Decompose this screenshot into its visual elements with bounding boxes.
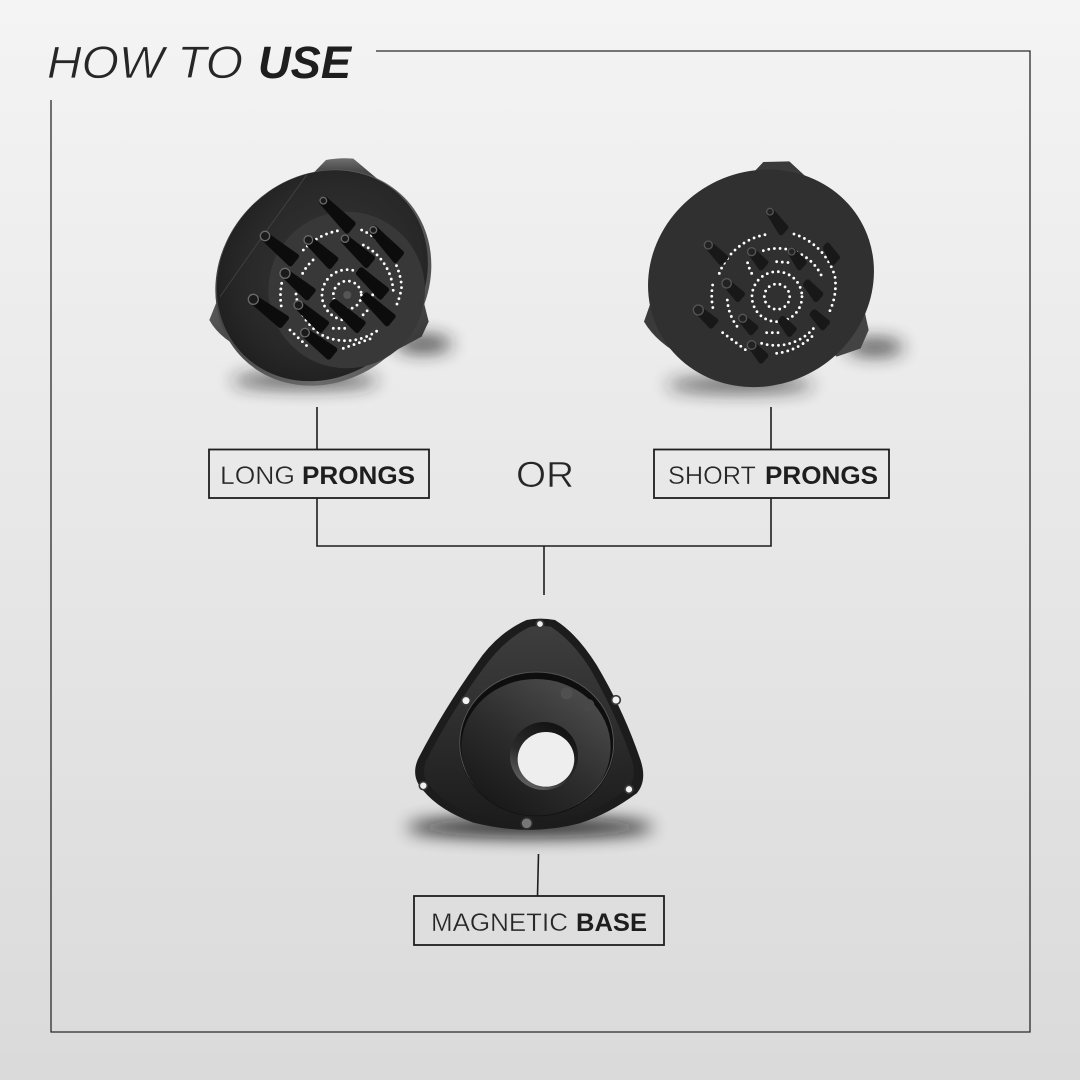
label: short prongs (654, 450, 889, 498)
label: short prongs: SHORT (668, 462, 756, 490)
connector: long prongs (317, 407, 771, 595)
product: long prongs diffuser (171, 125, 476, 430)
product: magnetic base (407, 619, 653, 837)
product: short prongs diffuser (608, 128, 914, 428)
title: HOW TO (47, 37, 243, 88)
connector: magnetic base (538, 854, 539, 896)
label: or: OR (516, 454, 574, 495)
label: magnetic base: BASE (576, 909, 647, 937)
long prongs (252, 199, 401, 357)
prong tips (248, 197, 377, 337)
label: long prongs (209, 450, 429, 498)
title: USE (258, 37, 353, 88)
label: magnetic base: MAGNETIC (431, 909, 568, 937)
label: magnetic base (414, 896, 664, 945)
label: short prongs: PRONGS (765, 462, 878, 490)
label: long prongs: LONG (220, 462, 295, 490)
screw holes (419, 620, 633, 829)
short prongs (697, 210, 837, 361)
label: long prongs: PRONGS (302, 462, 415, 490)
short prong tips (693, 208, 795, 349)
